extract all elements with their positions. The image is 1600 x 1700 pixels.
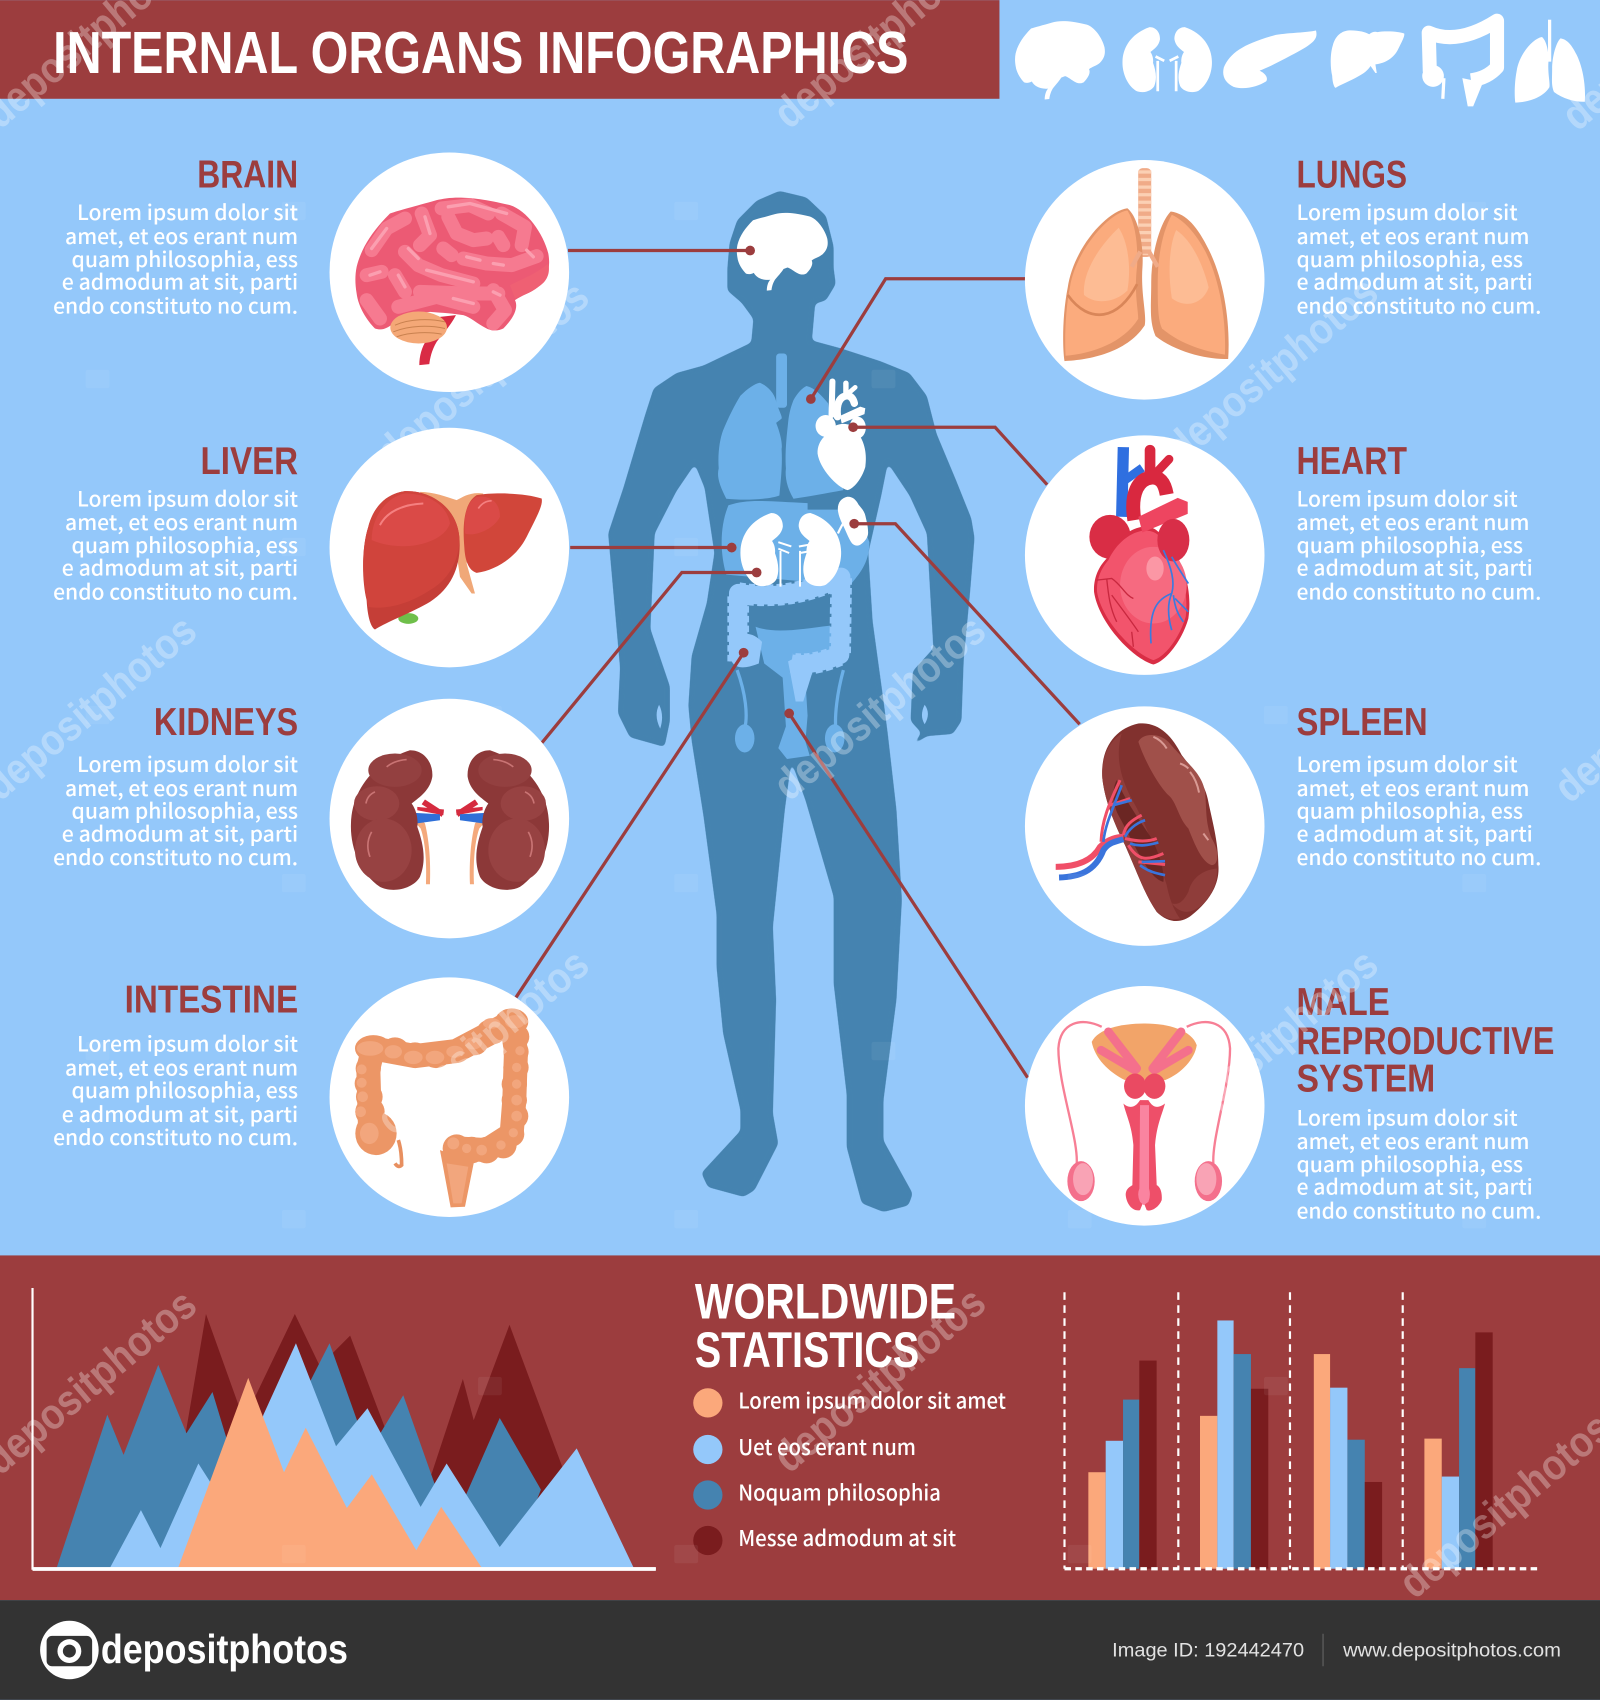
icon: brain [355,198,549,365]
icon: male reproductive organs [1058,1022,1230,1211]
panel: intestine: endo constituto no cum. [53,1121,298,1152]
footer bar: Image ID: 192442470 [1112,1640,1304,1662]
panel: intestine [53,977,569,1217]
panel: male reproductive system: SYSTEM [1296,1058,1435,1101]
panel: spleen: endo constituto no cum. [1296,841,1541,872]
icon: liver [363,491,542,629]
heading: WORLDWIDE [695,1273,956,1329]
panel: liver: quam philosophia, ess [72,529,298,560]
area chart [33,1288,656,1571]
panel: heart [1025,435,1541,675]
title banner [0,0,999,99]
panel: lungs: LUNGS [1296,154,1407,197]
panel: kidneys [53,699,569,938]
panel: intestine: Lorem ipsum dolor sit [77,1028,299,1059]
title banner: INTERNAL ORGANS INFOGRAPHICS [53,19,908,86]
panel: brain: quam philosophia, ess [72,243,298,274]
panel: heart: e admodum at sit, parti [1296,552,1533,583]
icon: kidneys [351,750,549,890]
body organs: spleen [838,497,868,546]
panel: male reproductive system: REPRODUCTIVE [1296,1020,1554,1063]
panel: intestine: INTESTINE [125,979,298,1022]
icon row: white organ silhouettes [1015,20,1585,106]
panel: intestine: e admodum at sit, parti [62,1098,298,1129]
panel: spleen: amet, et eos erant num [1296,772,1530,803]
panel: spleen: SPLEEN [1296,701,1428,744]
panel: heart: quam philosophia, ess [1296,529,1523,560]
panel: kidneys: Lorem ipsum dolor sit [77,748,299,779]
footer bar: depositphotos [101,1626,348,1672]
panel: heart: endo constituto no cum. [1296,576,1541,607]
panel: kidneys: endo constituto no cum. [53,841,298,872]
legend: Noquam philosophia [738,1476,941,1507]
panel: spleen: Lorem ipsum dolor sit [1296,748,1518,779]
watermarks: depositphotos [1157,940,1387,1144]
legend: Messe admodum at sit [738,1522,956,1553]
panel: lungs: endo constituto no cum. [1296,289,1541,320]
bar chart [1064,1292,1537,1569]
panel: heart: HEART [1296,440,1407,483]
heading: STATISTICS [695,1322,919,1378]
panel: kidneys: quam philosophia, ess [72,795,298,826]
panel: male reproductive system: Lorem ipsum dolor sit [1296,1101,1518,1132]
panel: liver: LIVER [201,440,298,483]
panel: male reproductive system: MALE [1296,981,1390,1024]
body organs: brain [737,213,828,291]
panel: lungs: quam philosophia, ess [1296,243,1523,274]
panel: spleen [1025,701,1541,946]
watermarks: depositphotos [368,272,598,476]
watermarks: depositphotos [1157,268,1387,472]
panel: spleen: quam philosophia, ess [1296,795,1523,826]
panel: male reproductive system: quam philosophia, ess [1296,1148,1523,1179]
legend [693,1384,1006,1555]
panel: brain: Lorem ipsum dolor sit [77,196,299,227]
panel: liver: Lorem ipsum dolor sit [77,482,299,513]
panel: brain: e admodum at sit, parti [62,266,298,297]
panel: male reproductive system: e admodum at sit, parti [1296,1171,1533,1202]
body organs: liver and stomach [722,501,869,586]
heading [695,1273,956,1378]
panel: heart: amet, et eos erant num [1296,506,1530,537]
icon: depositphotos logo [40,1621,99,1679]
panel: worldwide statistics [0,1255,1600,1600]
panel: liver: e admodum at sit, parti [62,552,298,583]
footer bar: www.depositphotos.com [1342,1640,1561,1662]
panel: kidneys: amet, et eos erant num [65,772,298,803]
panel: liver: amet, et eos erant num [65,506,298,537]
panel: heart: Lorem ipsum dolor sit [1296,482,1518,513]
panel: intestine: quam philosophia, ess [72,1074,298,1105]
human body silhouette [608,191,975,1212]
footer bar [0,1600,1600,1700]
legend: Uet eos erant num [738,1431,916,1462]
panel: brain [53,152,569,392]
icon: intestine [355,1008,529,1207]
panel: lungs: e admodum at sit, parti [1296,266,1533,297]
watermarks: depositphotos [368,940,598,1144]
body organs: large intestine [738,577,841,664]
panel: male reproductive system: endo constituto no cum. [1296,1195,1541,1226]
panel: kidneys: KIDNEYS [154,701,298,744]
panel: male reproductive system [1025,981,1554,1226]
icon: heart [1089,447,1189,664]
hand slits [657,705,928,729]
panel: liver [53,428,569,667]
body organs: heart [816,381,866,490]
panel: lungs [1025,154,1541,400]
panel: lungs: Lorem ipsum dolor sit [1296,196,1518,227]
panel: brain: amet, et eos erant num [65,220,298,251]
panel: male reproductive system: amet, et eos erant num [1296,1125,1530,1156]
legend: Lorem ipsum dolor sit amet [738,1384,1006,1415]
body organs: bladder and reproductive [756,626,835,759]
watermarks: depositphotos [765,606,995,810]
panel: spleen: e admodum at sit, parti [1296,817,1533,848]
watermarks: depositphotos [765,1278,995,1482]
panel: lungs: amet, et eos erant num [1296,220,1530,251]
panel: brain: BRAIN [197,154,298,197]
panel: kidneys: e admodum at sit, parti [62,817,298,848]
icon: spleen [1056,723,1219,921]
pointer lines with dots [516,246,1080,1078]
icon: lungs [1063,168,1229,361]
panel: liver: endo constituto no cum. [53,576,298,607]
body organs: lungs and windpipe [718,354,869,759]
panel: brain: endo constituto no cum. [53,289,298,320]
panel: intestine: amet, et eos erant num [65,1051,298,1082]
body organs: kidneys [740,513,841,587]
